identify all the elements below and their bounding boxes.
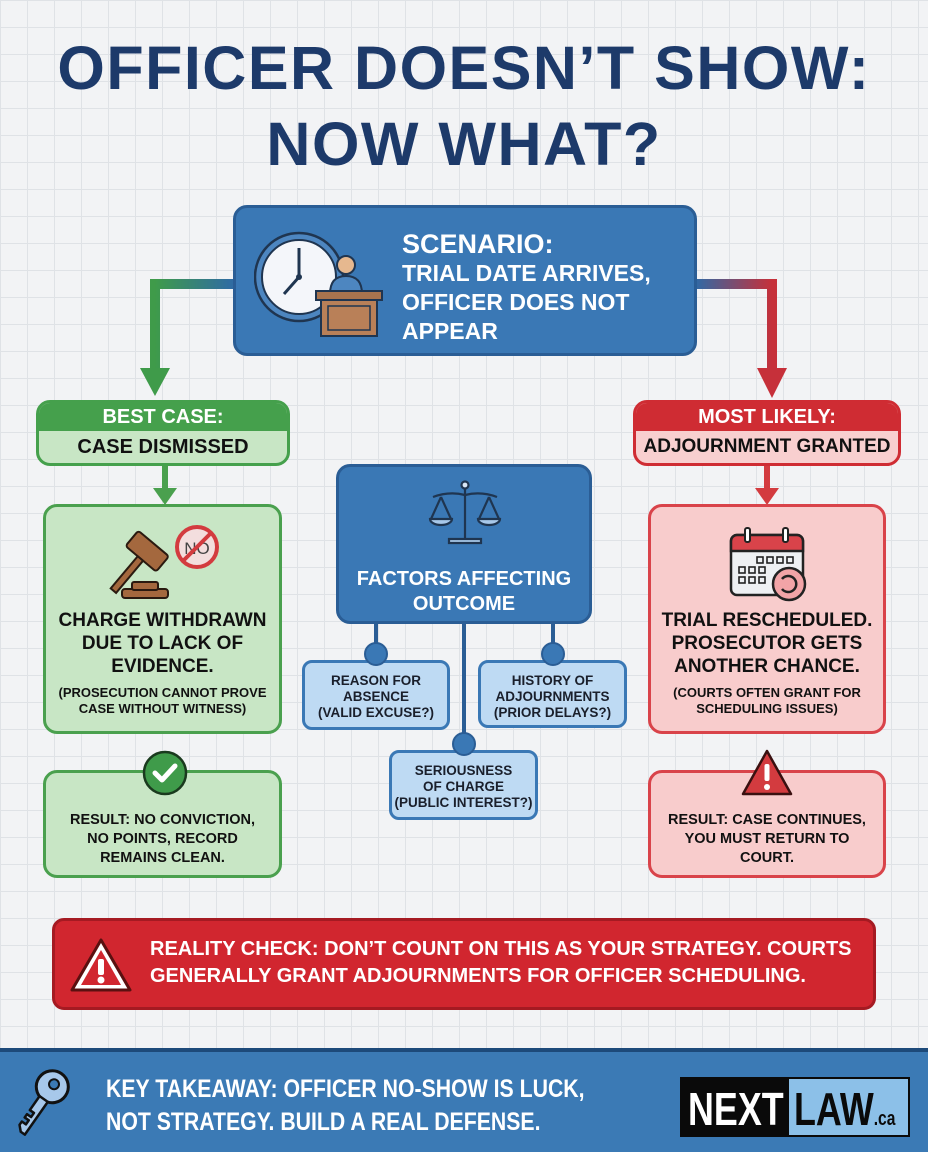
icon: seriousness circle (452, 732, 476, 756)
panel: seriousness of charge: SERIOUSNESS (415, 763, 512, 778)
panel: scenario (233, 205, 697, 356)
icon: key (18, 1069, 70, 1136)
panel: most likely header: MOST LIKELY: (698, 406, 836, 428)
icon: warning (742, 750, 792, 796)
footer: key takeaway (0, 1048, 928, 1152)
panel: green result: NO POINTS, RECORD (87, 831, 238, 847)
panel: red result: RESULT: CASE CONTINUES, (668, 812, 866, 828)
icon: clock and podium (254, 232, 383, 337)
panel: green result: RESULT: NO CONVICTION, (70, 812, 255, 828)
scenario text (402, 229, 651, 344)
text: charge withdrawn: DUE TO LACK OF (82, 633, 243, 654)
panel: seriousness of charge: (PUBLIC INTEREST?) (394, 795, 532, 810)
text: factors heading (357, 568, 571, 615)
text: factors heading: FACTORS AFFECTING (357, 568, 571, 590)
logo: NEXT LAW.ca: NEXT (688, 1083, 784, 1135)
text: reality check: GENERALLY GRANT ADJOURNMENTS FOR OFFICER SCHEDULING. (150, 965, 806, 987)
panel: reason for absence: REASON FOR (331, 673, 421, 688)
panel: history of adjournments (478, 660, 627, 728)
panel: red result: COURT. (740, 850, 794, 866)
panel: best case header: BEST CASE: (102, 406, 224, 428)
title: OFFICER DOESN’T SHOW: (57, 34, 871, 102)
text: reality check: REALITY CHECK: DON’T COUNT ON THIS AS YOUR STRATEGY. COURTS (150, 938, 852, 960)
logo: NEXT LAW.ca: LAW.ca (794, 1083, 895, 1135)
icon: warning (70, 938, 132, 992)
title (57, 34, 871, 178)
panel: seriousness of charge: OF CHARGE (423, 779, 504, 794)
panel: adjournment details: SCHEDULING ISSUES) (696, 701, 838, 716)
text: reality check (150, 938, 852, 987)
text: trial rescheduled: PROSECUTOR GETS (672, 633, 862, 654)
panel: history of adjournments: ADJOURNMENTS (495, 689, 610, 704)
panel: best case header: CASE DISMISSED (77, 436, 249, 458)
panel: case dismissed details: CASE WITHOUT WITNESS) (79, 701, 246, 716)
icon: scales (428, 480, 502, 544)
text: takeaway: KEY TAKEAWAY: OFFICER NO-SHOW IS LUCK, (106, 1075, 585, 1103)
scenario text: APPEAR (402, 318, 498, 344)
panel: best case header (36, 400, 290, 466)
text: trial rescheduled: ANOTHER CHANCE. (674, 656, 860, 677)
panel: reason for absence: ABSENCE (343, 689, 409, 704)
icon: calendar (730, 527, 806, 602)
scenario text: SCENARIO: (402, 229, 554, 259)
panel: most likely header: ADJOURNMENT GRANTED (644, 436, 890, 457)
icon: gavel with no sign (109, 525, 219, 599)
scenario text: OFFICER DOES NOT (402, 289, 629, 315)
scenario text: TRIAL DATE ARRIVES, (402, 260, 651, 286)
panel: factors (336, 464, 592, 624)
icon: reason circle (364, 642, 388, 666)
text: charge withdrawn (59, 610, 266, 677)
title: NOW WHAT? (266, 110, 662, 178)
panel: red result: YOU MUST RETURN TO (685, 831, 849, 847)
text: trial rescheduled: TRIAL RESCHEDULED. (662, 610, 872, 631)
panel: seriousness of charge (389, 750, 538, 820)
text: factors heading: OUTCOME (413, 593, 515, 615)
callout: reality check (52, 918, 876, 1010)
text: trial rescheduled (662, 610, 872, 677)
panel: most likely header (633, 400, 901, 466)
panel: history of adjournments: HISTORY OF (512, 673, 593, 688)
panel: adjournment details (648, 504, 886, 734)
panel: history of adjournments: (PRIOR DELAYS?) (494, 705, 611, 720)
icon: history circle (541, 642, 565, 666)
panel: adjournment details: (COURTS OFTEN GRANT FOR (673, 685, 861, 700)
text: takeaway: NOT STRATEGY. BUILD A REAL DEFENSE. (106, 1108, 540, 1136)
icon: check (142, 750, 188, 796)
panel: green result: REMAINS CLEAN. (100, 850, 225, 866)
text: charge withdrawn: CHARGE WITHDRAWN (59, 610, 266, 631)
panel: reason for absence: (VALID EXCUSE?) (318, 705, 434, 720)
icon: gavel with no sign: NO (184, 539, 210, 558)
panel: case dismissed details (43, 504, 282, 734)
logo: NEXT LAW.ca (680, 1077, 910, 1137)
text: takeaway (106, 1075, 585, 1136)
panel: green result (43, 770, 282, 878)
panel: case dismissed details: (PROSECUTION CANNOT PROVE (58, 685, 266, 700)
text: charge withdrawn: EVIDENCE. (111, 656, 214, 677)
panel: reason for absence (302, 660, 450, 730)
panel: red result (648, 770, 886, 878)
